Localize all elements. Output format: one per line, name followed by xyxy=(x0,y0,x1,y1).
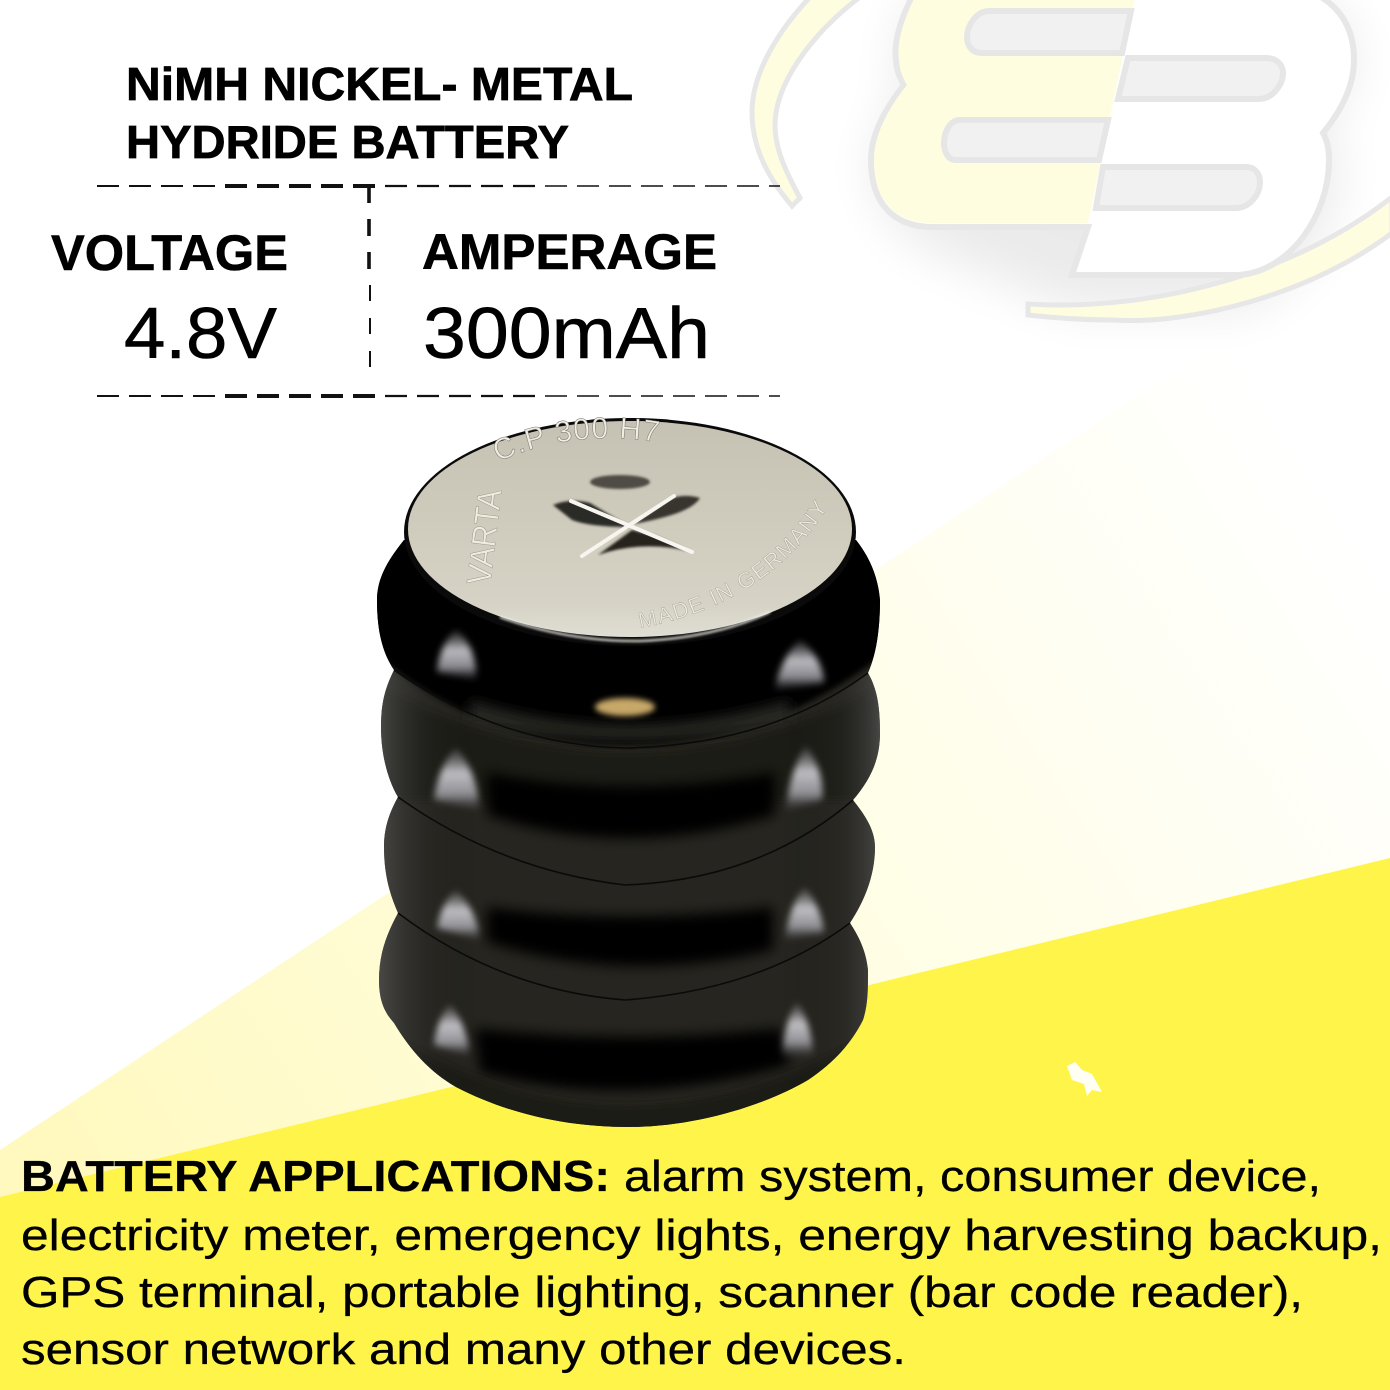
ring 4 black band xyxy=(475,1028,790,1090)
white speck on yellow band xyxy=(1067,1062,1102,1096)
ring 1 black zone xyxy=(377,540,880,747)
disc embossed text xyxy=(460,417,824,628)
top disc metal xyxy=(408,421,852,637)
battery applications text: alarm system, consumer device, xyxy=(624,1152,1321,1201)
logo letter body white xyxy=(871,0,1354,275)
background: bright yellow bottom band xyxy=(0,858,1390,1390)
logo bar 3 xyxy=(944,120,1108,160)
battery applications text: GPS terminal, portable lighting, scanner (bar code reader), xyxy=(21,1268,1303,1317)
amperage label: AMPERAGE xyxy=(422,224,717,280)
brass reflection xyxy=(595,698,655,716)
logo letter body yellow half xyxy=(874,0,1135,223)
voltage value: 4.8V xyxy=(124,294,277,374)
highlights xyxy=(434,630,824,1056)
ring 3 black band xyxy=(487,907,773,966)
battery photo illustration xyxy=(377,417,880,1127)
battery applications text: BATTERY APPLICATIONS: xyxy=(21,1152,610,1201)
logo: EB watermark xyxy=(752,0,1390,321)
bottom lip shade xyxy=(406,1040,849,1127)
disc embossed text: VARTA xyxy=(460,487,510,587)
logo bar 4 xyxy=(1096,167,1260,208)
amperage value: 300mAh xyxy=(423,294,710,374)
title: NiMH NICKEL- METAL xyxy=(126,58,633,110)
logo bottom swoosh xyxy=(1028,197,1390,321)
title xyxy=(126,58,633,168)
logo bar 2 xyxy=(1118,58,1283,99)
dashed spec table lines xyxy=(97,186,780,396)
ring 2 black band xyxy=(487,772,775,838)
battery applications text xyxy=(21,1152,1382,1374)
side edge sheen xyxy=(379,670,880,1060)
ring 1 lower grey lip xyxy=(470,700,790,740)
disc edge glint xyxy=(500,612,770,641)
disc embossed text: MADE IN GERMANY xyxy=(638,499,824,628)
logo bar 1 xyxy=(967,11,1131,53)
seams xyxy=(394,670,868,1000)
title: HYDRIDE BATTERY xyxy=(126,116,569,168)
logo left swoosh xyxy=(752,0,860,206)
battery applications text: electricity meter, emergency lights, energy harvesting backup, xyxy=(21,1211,1382,1260)
logo soft shadow xyxy=(871,0,1360,310)
disc X mark xyxy=(553,475,700,556)
top disc rim xyxy=(404,418,856,646)
voltage label: VOLTAGE xyxy=(51,225,288,281)
ring 2 grey xyxy=(385,690,880,800)
disc embossed text: C.P 300 H7 xyxy=(494,417,660,459)
battery body xyxy=(377,540,880,1127)
battery applications text: sensor network and many other devices. xyxy=(21,1325,906,1374)
background: pale yellow diagonal wedge xyxy=(0,345,1390,1390)
